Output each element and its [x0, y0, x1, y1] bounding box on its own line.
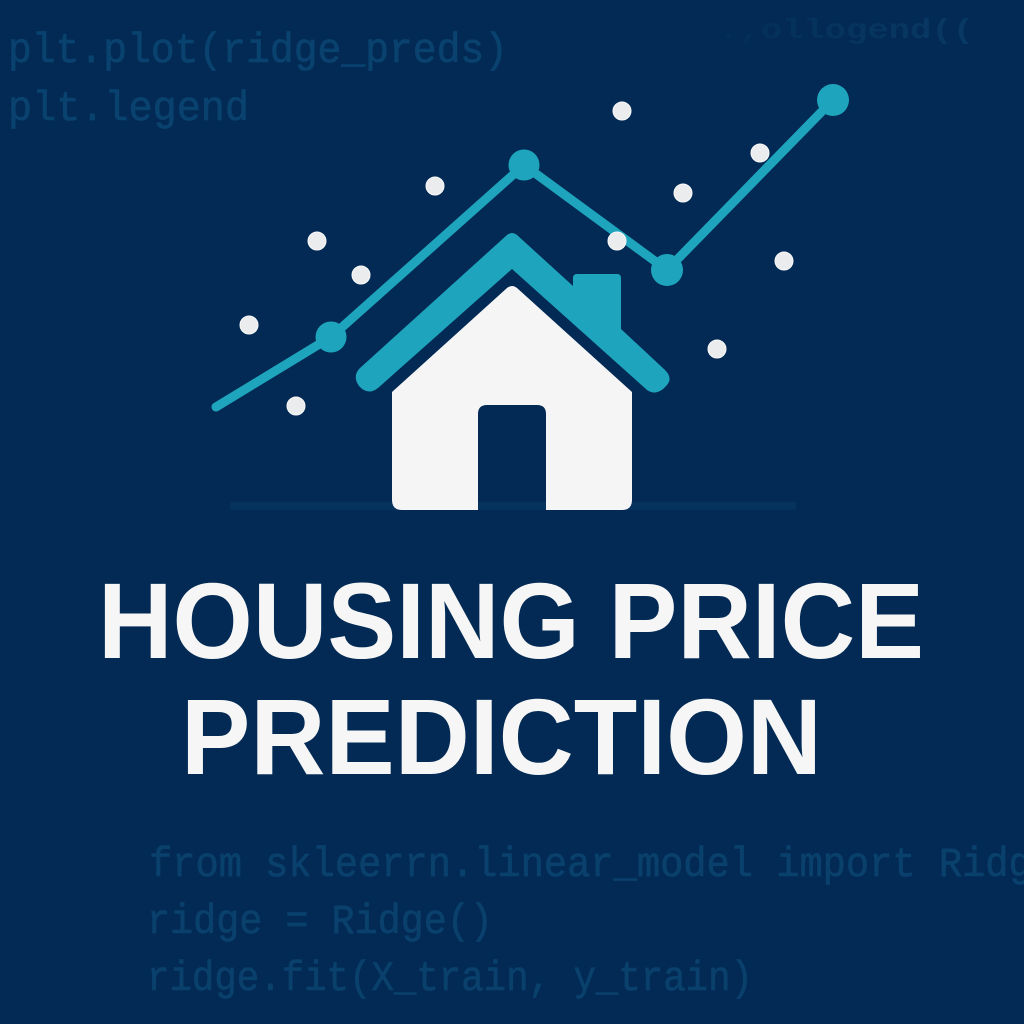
title	[98, 560, 924, 797]
code snippet: top left: plt.plot(ridge_preds)	[8, 27, 508, 75]
code snippet: top left	[8, 27, 508, 133]
code snippet: top right: .,ollogend((	[718, 16, 974, 47]
code snippet: bottom: ridge = Ridge()	[147, 898, 493, 946]
house body with door	[392, 286, 632, 510]
house roof and chimney	[356, 233, 670, 393]
title: HOUSING PRICE	[98, 560, 924, 681]
icon: house	[356, 233, 670, 510]
line chart trend	[216, 84, 849, 407]
code snippet: top left: plt.legend	[8, 85, 249, 133]
code snippet: bottom: ridge.fit(X_train, y_train)	[147, 955, 753, 1003]
title: PREDICTION	[181, 676, 822, 797]
ground shadow line	[230, 502, 796, 510]
scatter points	[240, 102, 793, 415]
code snippet: bottom	[147, 841, 1024, 1003]
